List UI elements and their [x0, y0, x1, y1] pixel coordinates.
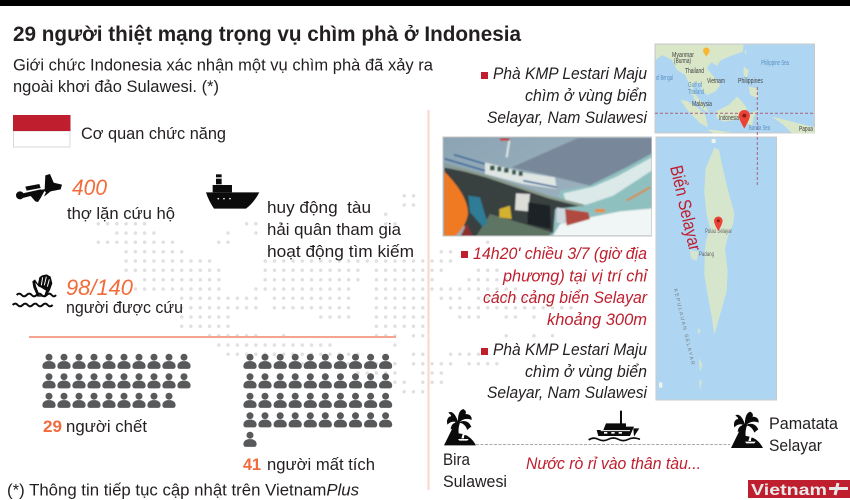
label: 41 missing: người mất tích — [267, 455, 375, 474]
pictogram: 41 missing — [243, 354, 392, 447]
label: Bira — [443, 450, 507, 491]
title: 29 người thiệt mạng trọng vụ chìm phà ở Indonesia — [13, 22, 522, 46]
pictogram: 29 dead — [42, 354, 191, 408]
icon: rescued hand above waves — [13, 274, 56, 306]
icon: diver — [16, 174, 62, 202]
stat: divers: thợ lặn cứu hộ — [67, 204, 175, 223]
icon: palm island Bira — [444, 409, 476, 445]
label: 29 dead: 29 — [43, 417, 62, 436]
location text top: Phà KMP Lestari Maju — [493, 64, 647, 83]
navy ships text: huy động tàu — [267, 198, 371, 217]
label: 41 missing: 41 — [243, 455, 261, 474]
map: Selayar island — [656, 137, 776, 400]
location text top: chìm ở vùng biển — [525, 86, 647, 105]
map labels: Thailand — [685, 68, 704, 75]
map labels: Banda Sea — [749, 125, 770, 132]
island labels: Padang — [699, 252, 714, 258]
navy ships text: hoạt động tìm kiếm — [267, 242, 414, 261]
horizontal divider — [29, 336, 396, 338]
background dotted world map — [98, 196, 572, 392]
intro text — [13, 56, 434, 96]
map labels: of Bengal — [656, 75, 673, 82]
icon: ferry — [589, 411, 640, 441]
map labels: Philippine Sea — [761, 60, 789, 67]
navy ships text: hải quân tham gia — [267, 220, 402, 239]
red timing text: phương) tại vị trí chỉ — [502, 266, 648, 286]
location text bottom: Phà KMP Lestari Maju — [493, 340, 647, 359]
island labels: KEPULAUAN SELAYAR — [672, 288, 696, 366]
map labels: Vietnam — [707, 78, 725, 85]
island labels: Pulau Selayar — [705, 229, 732, 235]
label: Pamatata: Selayar — [769, 436, 822, 455]
location text bottom: Selayar, Nam Sulawesi — [487, 383, 648, 402]
location text top: Selayar, Nam Sulawesi — [487, 108, 648, 127]
intro text: ngoài khơi đảo Sulawesi. (*) — [13, 77, 219, 96]
stat: rescued: 98/140 — [66, 275, 134, 300]
icon: Indonesian flag — [13, 115, 70, 147]
map labels: Gulf of — [688, 82, 702, 89]
icon: palm island Pamatata — [731, 412, 763, 448]
island labels — [672, 229, 732, 366]
pin on Selayar map — [714, 216, 723, 231]
route dashed line — [476, 444, 730, 446]
map labels: Philippines — [738, 78, 763, 85]
location text bottom: chìm ở vùng biển — [525, 362, 647, 381]
location text top — [481, 64, 648, 127]
label: Pamatata — [769, 414, 839, 455]
map labels: Papua — [799, 126, 813, 133]
map labels: Indonesia — [719, 115, 739, 122]
map labels: Malaysia — [692, 101, 712, 108]
yellow pin — [703, 48, 710, 56]
intro text: Giới chức Indonesia xác nhận một vụ chìm phà đã xảy ra — [13, 56, 434, 74]
map labels: Myanmar — [672, 52, 694, 59]
label: Pamatata: Pamatata — [769, 414, 839, 433]
red timing text: khoảng 300m — [547, 310, 647, 329]
vertical divider — [428, 110, 430, 490]
logo: VietnamPlus: Vietnam — [751, 482, 827, 499]
map labels: (Burma) — [674, 58, 691, 65]
stat: divers: 400 — [72, 175, 108, 200]
map labels: Thailand — [688, 89, 704, 96]
stat: divers — [67, 175, 175, 223]
label: 29 dead: người chết — [66, 417, 147, 436]
dashed locator lines — [655, 87, 814, 187]
label: Bira: Bira — [443, 450, 470, 469]
icon: navy ship — [206, 174, 259, 209]
red timing text: 14h20' chiều 3/7 (giờ địa — [473, 244, 647, 263]
stat: rescued — [66, 275, 183, 317]
map: Southeast Asia — [655, 44, 815, 133]
navy ships text — [267, 198, 414, 261]
red timing text: cách cảng biển Selayar — [483, 288, 648, 307]
sinking caption: Nước rò rỉ vào thân tàu... — [526, 454, 701, 473]
label: Bira: Sulawesi — [443, 472, 507, 491]
location text bottom — [481, 340, 648, 402]
photo: sinking ferry — [440, 134, 657, 241]
sea name label: Biển Selayar — [666, 163, 705, 253]
footnote: (*) Thông tin tiếp tục cập nhật trên VietnamPlus — [7, 480, 359, 500]
stat: rescued: người được cứu — [66, 298, 183, 317]
pin on Indonesia map — [739, 110, 750, 128]
logo: VietnamPlus — [748, 480, 850, 499]
top black bar — [0, 0, 850, 6]
red timing text — [461, 244, 648, 329]
map labels — [656, 52, 813, 133]
agency label: Cơ quan chức năng — [81, 124, 226, 143]
